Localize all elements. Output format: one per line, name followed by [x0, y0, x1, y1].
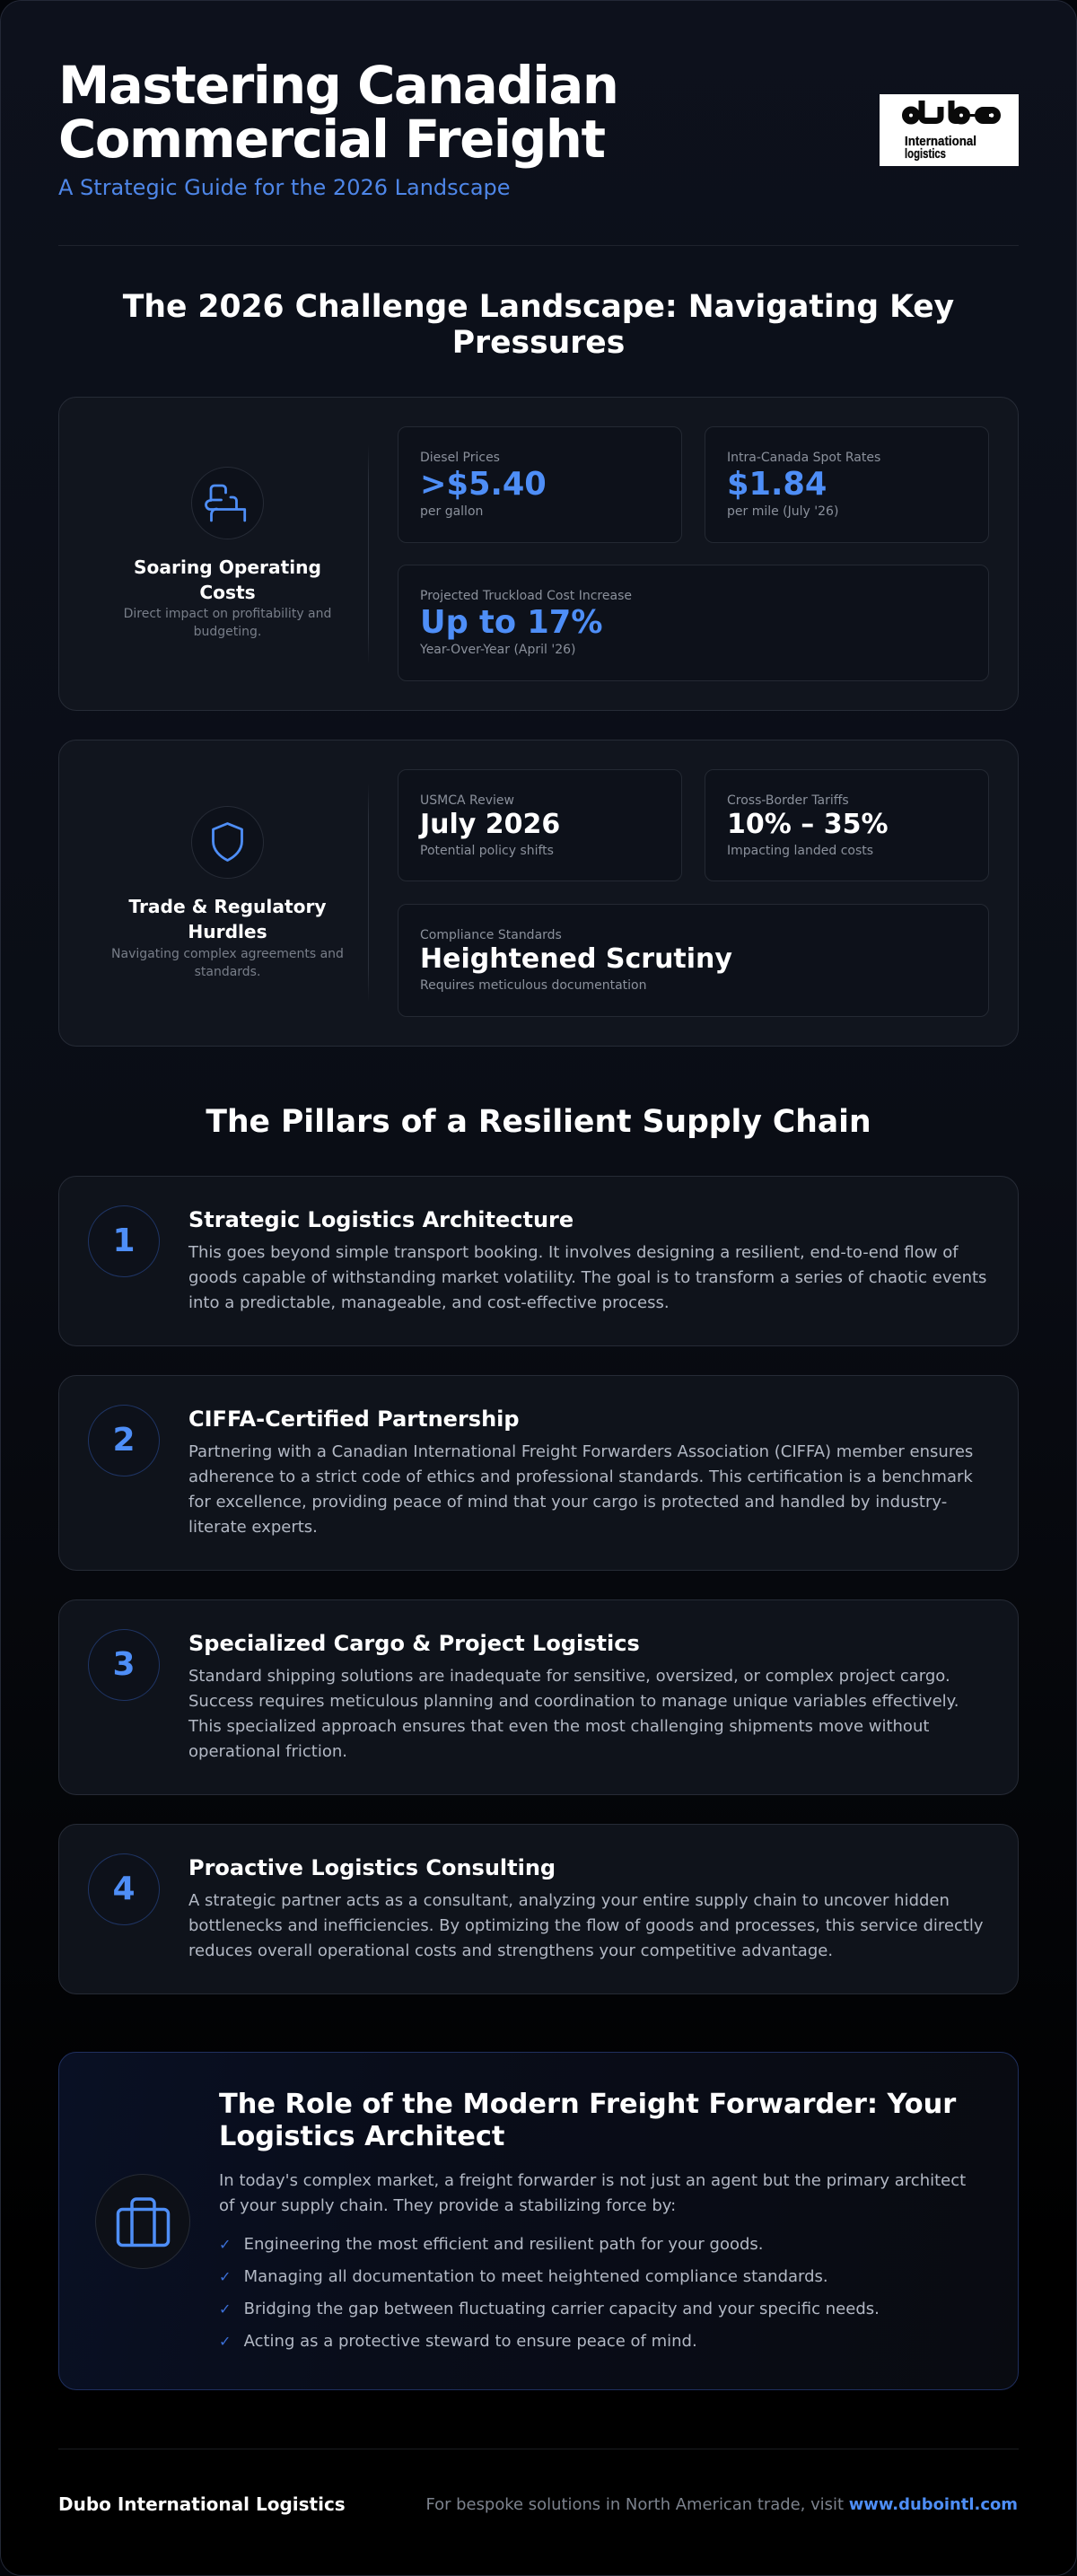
panel heading	[219, 2089, 957, 2152]
panel heading: The Role of the Modern Freight Forwarder: Your	[219, 2089, 956, 2120]
intro text: In today's complex market, a freight forwarder is not just an agent but the primary architect	[219, 2171, 966, 2190]
number badge 1: 1	[112, 1222, 136, 1259]
heading: challenge landscape: Pressures	[452, 325, 625, 361]
pillar text	[188, 1442, 973, 1537]
panel: trade and regulatory hurdles	[58, 740, 1019, 1047]
stat: diesel prices	[398, 426, 682, 543]
pillar text: A strategic partner acts as a consultant, analyzing your entire supply chain to uncover hidden	[188, 1891, 950, 1910]
panel description	[111, 947, 344, 979]
pillar text: This specialized approach ensures that even the most challenging shipments move without	[188, 1717, 929, 1736]
heading: pillars: The Pillars of a Resilient Supply Chain	[206, 1104, 871, 1140]
panel heading: Costs	[199, 582, 256, 603]
panel description: Navigating complex agreements and	[111, 947, 344, 961]
stat: USMCA review: Potential policy shifts	[420, 844, 554, 858]
pillar text: Partnering with a Canadian International Freight Forwarders Association (CIFFA) member ensures	[188, 1442, 973, 1461]
logo: dubo International logistics: International	[905, 134, 976, 149]
logo: dubo International logistics	[880, 94, 1019, 166]
pillar title: Strategic Logistics Architecture	[188, 1207, 574, 1232]
stat: spot rates: $1.84	[727, 465, 827, 503]
pillar text	[188, 1667, 959, 1761]
pillar text	[188, 1891, 984, 1960]
checklist item: Acting as a protective steward to ensure peace of mind.	[244, 2332, 697, 2350]
panel heading: Soaring Operating	[134, 556, 321, 578]
intro text: of your supply chain. They provide a stabilizing force by:	[219, 2196, 676, 2215]
panel: modern freight forwarder	[58, 2052, 1019, 2390]
stat: cross-border tariffs: Cross-Border Tariffs	[727, 793, 849, 808]
pillar 1	[58, 1176, 1019, 1346]
stat: cross-border tariffs: 10% – 35%	[727, 809, 889, 840]
stat: compliance standards: Compliance Standards	[420, 928, 562, 942]
stat: compliance standards: Heightened Scrutiny	[420, 943, 732, 975]
stat: spot rates: per mile (July '26)	[727, 504, 838, 519]
panel heading	[128, 896, 327, 942]
checklist item: Managing all documentation to meet heightened compliance standards.	[244, 2267, 828, 2285]
number badge 2: 2	[112, 1422, 136, 1459]
pillar title: Specialized Cargo & Project Logistics	[188, 1631, 640, 1656]
stat: truckload cost increase: Up to 17%	[420, 603, 602, 641]
number badge 2	[88, 1405, 160, 1476]
pillar text: into a predictable, manageable, and cost-effective process.	[188, 1293, 670, 1312]
pillar text	[188, 1243, 986, 1312]
title: Mastering Canadian	[58, 56, 617, 116]
panel heading	[134, 556, 321, 603]
heading: challenge landscape	[122, 289, 954, 361]
panel description: Direct impact on profitability and	[124, 607, 331, 621]
pillar text: reduces overall operational costs and strengthens your competitive advantage.	[188, 1941, 833, 1960]
subtitle: A Strategic Guide for the 2026 Landscape	[58, 175, 511, 200]
panel description: budgeting.	[194, 625, 261, 639]
title	[58, 56, 617, 170]
pillar text: for excellence, providing peace of mind that your cargo is protected and handled by industry-	[188, 1493, 947, 1511]
panel heading: Hurdles	[188, 921, 267, 942]
pillar text: adherence to a strict code of ethics and professional standards. This certification is a benchmark	[188, 1468, 973, 1486]
title: Commercial Freight	[58, 110, 605, 170]
icon: briefcase	[95, 2174, 190, 2269]
stat: USMCA review: July 2026	[420, 809, 560, 840]
pillar text: Standard shipping solutions are inadequate for sensitive, oversized, or complex project cargo.	[188, 1667, 950, 1686]
number badge 3	[88, 1629, 160, 1701]
pillar 2	[58, 1375, 1019, 1571]
checklist item: ✓	[219, 2267, 231, 2285]
stat: cross-border tariffs: Impacting landed costs	[727, 844, 873, 858]
checklist item: ✓	[219, 2300, 231, 2318]
pillar 3	[58, 1599, 1019, 1795]
pillar text: This goes beyond simple transport booking. It involves designing a resilient, end-to-end flow of	[188, 1243, 959, 1262]
number badge 1	[88, 1205, 160, 1277]
number badge 4	[88, 1853, 160, 1925]
checklist item: Engineering the most efficient and resilient path for your goods.	[244, 2235, 764, 2253]
stat: truckload cost increase	[398, 565, 989, 681]
icon: operating costs	[191, 467, 264, 539]
stat: cross-border tariffs	[705, 769, 989, 881]
stat: diesel prices: per gallon	[420, 504, 483, 519]
pillar title: Proactive Logistics Consulting	[188, 1855, 556, 1880]
stat: compliance standards	[398, 904, 989, 1017]
panel heading: Trade & Regulatory	[128, 896, 327, 917]
stat: compliance standards: Requires meticulous documentation	[420, 978, 646, 993]
logo: dubo International logistics: logistics	[905, 146, 946, 162]
stat: diesel prices: Diesel Prices	[420, 451, 500, 465]
panel description: standards.	[195, 965, 260, 979]
heading: challenge landscape: The 2026 Challenge Landscape: Navigating Key	[123, 289, 954, 325]
icon: shield	[191, 806, 264, 879]
footer company name: Dubo International Logistics	[58, 2493, 346, 2515]
stat: truckload cost increase: Year-Over-Year (April '26)	[420, 643, 575, 657]
stat: truckload cost increase: Projected Truckload Cost Increase	[420, 589, 632, 603]
footer call to action: For bespoke solutions in North American trade, visit www.dubointl.com	[425, 2495, 1018, 2514]
pillar text: bottlenecks and inefficiencies. By optimizing the flow of goods and processes, this service directly	[188, 1916, 984, 1935]
stat: USMCA review: USMCA Review	[420, 793, 514, 808]
panel heading: Logistics Architect	[219, 2121, 504, 2152]
pillar text: literate experts.	[188, 1518, 318, 1537]
pillar 4	[58, 1824, 1019, 1994]
stat: diesel prices: >$5.40	[420, 465, 547, 503]
panel description	[124, 607, 331, 639]
intro text	[219, 2171, 966, 2215]
stat: spot rates: Intra-Canada Spot Rates	[727, 451, 880, 465]
pillar text: Success requires meticulous planning and coordination to manage unique variables effectively.	[188, 1692, 959, 1711]
number badge 3: 3	[112, 1646, 136, 1683]
number badge 4: 4	[112, 1871, 136, 1907]
checklist item: ✓	[219, 2332, 231, 2350]
pillar text: operational friction.	[188, 1742, 347, 1761]
checklist item: ✓	[219, 2235, 231, 2253]
pillar text: goods capable of withstanding market volatility. The goal is to transform a series of chaotic events	[188, 1268, 986, 1287]
checklist item: Bridging the gap between fluctuating carrier capacity and your specific needs.	[244, 2300, 880, 2318]
stat: spot rates	[705, 426, 989, 543]
pillar title: CIFFA-Certified Partnership	[188, 1406, 520, 1432]
stat: USMCA review	[398, 769, 682, 881]
panel: soaring operating costs	[58, 397, 1019, 711]
